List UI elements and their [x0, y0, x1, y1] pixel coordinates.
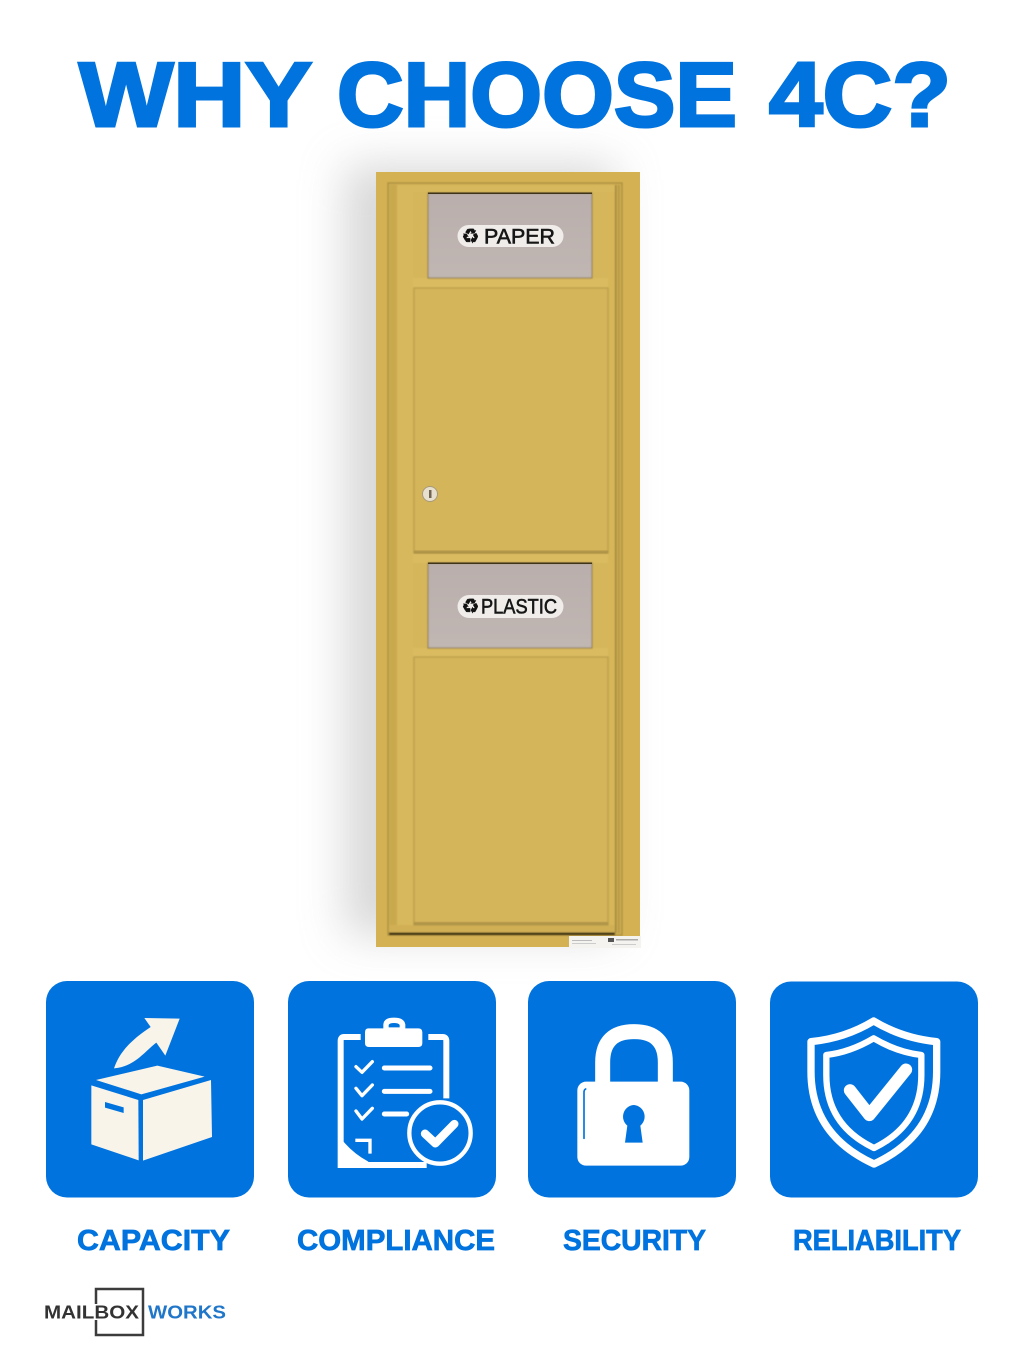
label: reliability: RELIABILITY	[793, 1225, 961, 1257]
label: plastic: PLASTIC	[481, 596, 557, 618]
label: paper: PAPER	[484, 226, 555, 248]
title	[79, 45, 951, 146]
panel: paper slot	[428, 192, 592, 278]
label: compliance: COMPLIANCE	[297, 1225, 495, 1257]
label: paper	[458, 225, 564, 248]
panel: lower door	[414, 657, 608, 925]
icon: door lock	[422, 486, 438, 502]
icon: box with arrow	[91, 1018, 212, 1161]
panel: compliance	[288, 981, 496, 1198]
panel: plastic slot	[428, 562, 592, 648]
label: plastic: ♻	[462, 596, 479, 618]
panel: reliability	[770, 982, 978, 1198]
logo: mailbox works	[44, 1289, 226, 1335]
label: security: SECURITY	[563, 1225, 706, 1257]
panel: upper door	[414, 288, 608, 554]
certification sticker	[569, 936, 641, 948]
logo: mailbox works: MAILBOX	[44, 1302, 139, 1322]
mailbox unit product image	[345, 165, 641, 948]
icon: clipboard with check	[338, 1018, 471, 1168]
icon: padlock	[577, 1032, 689, 1166]
logo: mailbox works: WORKS	[148, 1302, 226, 1322]
title: WHY	[79, 45, 312, 146]
label: paper: ♻	[462, 226, 479, 248]
panel: capacity	[46, 981, 254, 1198]
label: capacity: CAPACITY	[77, 1225, 230, 1257]
title: 4C?	[769, 45, 951, 146]
icon: shield with check	[811, 1021, 937, 1164]
title: CHOOSE	[337, 45, 737, 146]
panel: security	[528, 981, 736, 1198]
